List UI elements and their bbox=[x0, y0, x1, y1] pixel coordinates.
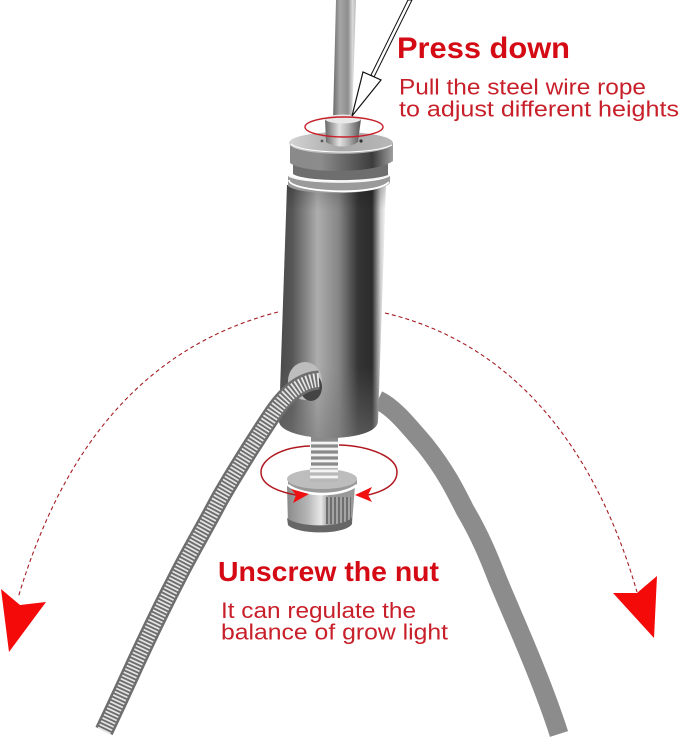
dashed arc arrow: right swing bbox=[385, 313, 657, 638]
knurled nut bbox=[287, 468, 357, 532]
top disk bbox=[289, 132, 393, 171]
flat strap: right cable bbox=[378, 400, 559, 734]
neck groove bbox=[293, 164, 388, 180]
red ellipse: press point bbox=[305, 117, 383, 137]
arrowhead: left bbox=[291, 489, 309, 503]
cylinder bbox=[279, 185, 386, 438]
outline arrow: press down bbox=[352, 0, 412, 116]
rotation arrow around nut bbox=[261, 445, 397, 503]
text: press down description: Pull the steel wire rope bbox=[399, 74, 646, 100]
cable hole bbox=[288, 362, 322, 401]
braided cable: left bbox=[104, 380, 319, 731]
gripper body bbox=[279, 114, 393, 478]
threaded screw bbox=[310, 432, 338, 478]
arrowhead: right bbox=[355, 487, 372, 502]
heading: unscrew the nut: Unscrew the nut bbox=[218, 556, 439, 587]
text: press down description bbox=[399, 74, 679, 122]
text: unscrew description: It can regulate the bbox=[221, 598, 416, 623]
text: press down description: to adjust different heights bbox=[399, 96, 679, 122]
steel wire rope: top rod bbox=[333, 0, 356, 120]
collar bbox=[321, 114, 363, 146]
lower ring bbox=[288, 175, 390, 193]
heading: press down: Press down bbox=[397, 32, 570, 65]
text: unscrew description bbox=[221, 598, 449, 644]
text: unscrew description: balance of grow light bbox=[221, 620, 449, 644]
dashed arc arrow: left swing bbox=[1, 312, 278, 652]
